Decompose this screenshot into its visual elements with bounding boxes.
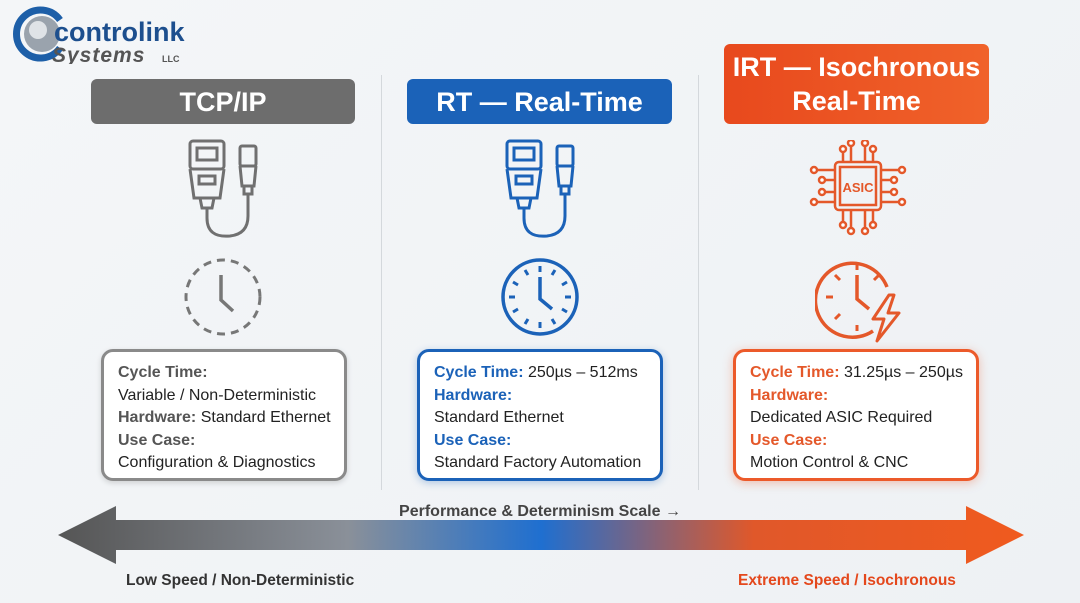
card: IRT: Cycle Time: 31.25µs – 250µs bbox=[750, 364, 963, 381]
icon: clock dashed bbox=[184, 258, 262, 336]
icon: ASIC chip: ASIC bbox=[842, 180, 874, 195]
dividers bbox=[381, 75, 382, 490]
header: IRT: IRT — Isochronous bbox=[733, 52, 980, 82]
card: TCP/IP bbox=[101, 349, 347, 481]
label: scale title: Performance & Determinism Scale → bbox=[399, 503, 681, 520]
card: RT bbox=[417, 349, 663, 481]
arrow: performance scale bbox=[58, 506, 1024, 564]
card: TCP/IP: Cycle Time: bbox=[118, 364, 208, 381]
card: RT: Standard Factory Automation bbox=[434, 454, 641, 471]
header: TCP/IP bbox=[91, 79, 355, 124]
logo bbox=[13, 6, 185, 64]
header: TCP/IP: TCP/IP bbox=[179, 86, 266, 116]
icon: clock blue bbox=[501, 258, 579, 336]
icon: ethernet grey bbox=[188, 140, 258, 238]
card: TCP/IP: Hardware: Standard Ethernet bbox=[118, 409, 331, 426]
icon: ASIC chip bbox=[810, 140, 906, 236]
card: IRT bbox=[733, 349, 979, 481]
card: IRT: Hardware: bbox=[750, 386, 828, 404]
card: RT: Standard Ethernet bbox=[434, 409, 564, 426]
card: IRT: Motion Control & CNC bbox=[750, 454, 908, 471]
card: IRT: Use Case: bbox=[750, 432, 827, 448]
header: RT bbox=[407, 79, 672, 124]
header: IRT bbox=[724, 44, 989, 124]
card: TCP/IP: Use Case: bbox=[118, 432, 195, 448]
card: IRT: Dedicated ASIC Required bbox=[750, 409, 932, 426]
card: TCP/IP: Configuration & Diagnostics bbox=[118, 454, 315, 471]
header: IRT: Real-Time bbox=[792, 86, 921, 116]
label: extreme speed: Extreme Speed / Isochronous bbox=[738, 572, 956, 589]
header: RT: RT — Real-Time bbox=[436, 86, 643, 116]
icon: ethernet blue bbox=[506, 140, 574, 238]
logo: controlink bbox=[54, 17, 185, 47]
label: low speed: Low Speed / Non-Deterministic bbox=[126, 572, 354, 589]
card: RT: Use Case: bbox=[434, 432, 511, 448]
card: RT: Cycle Time: 250µs – 512ms bbox=[434, 364, 638, 381]
icon: clock lightning bbox=[815, 262, 901, 342]
logo: LLC bbox=[162, 54, 180, 64]
card: TCP/IP: Variable / Non-Deterministic bbox=[118, 386, 316, 404]
card: RT: Hardware: bbox=[434, 386, 512, 404]
